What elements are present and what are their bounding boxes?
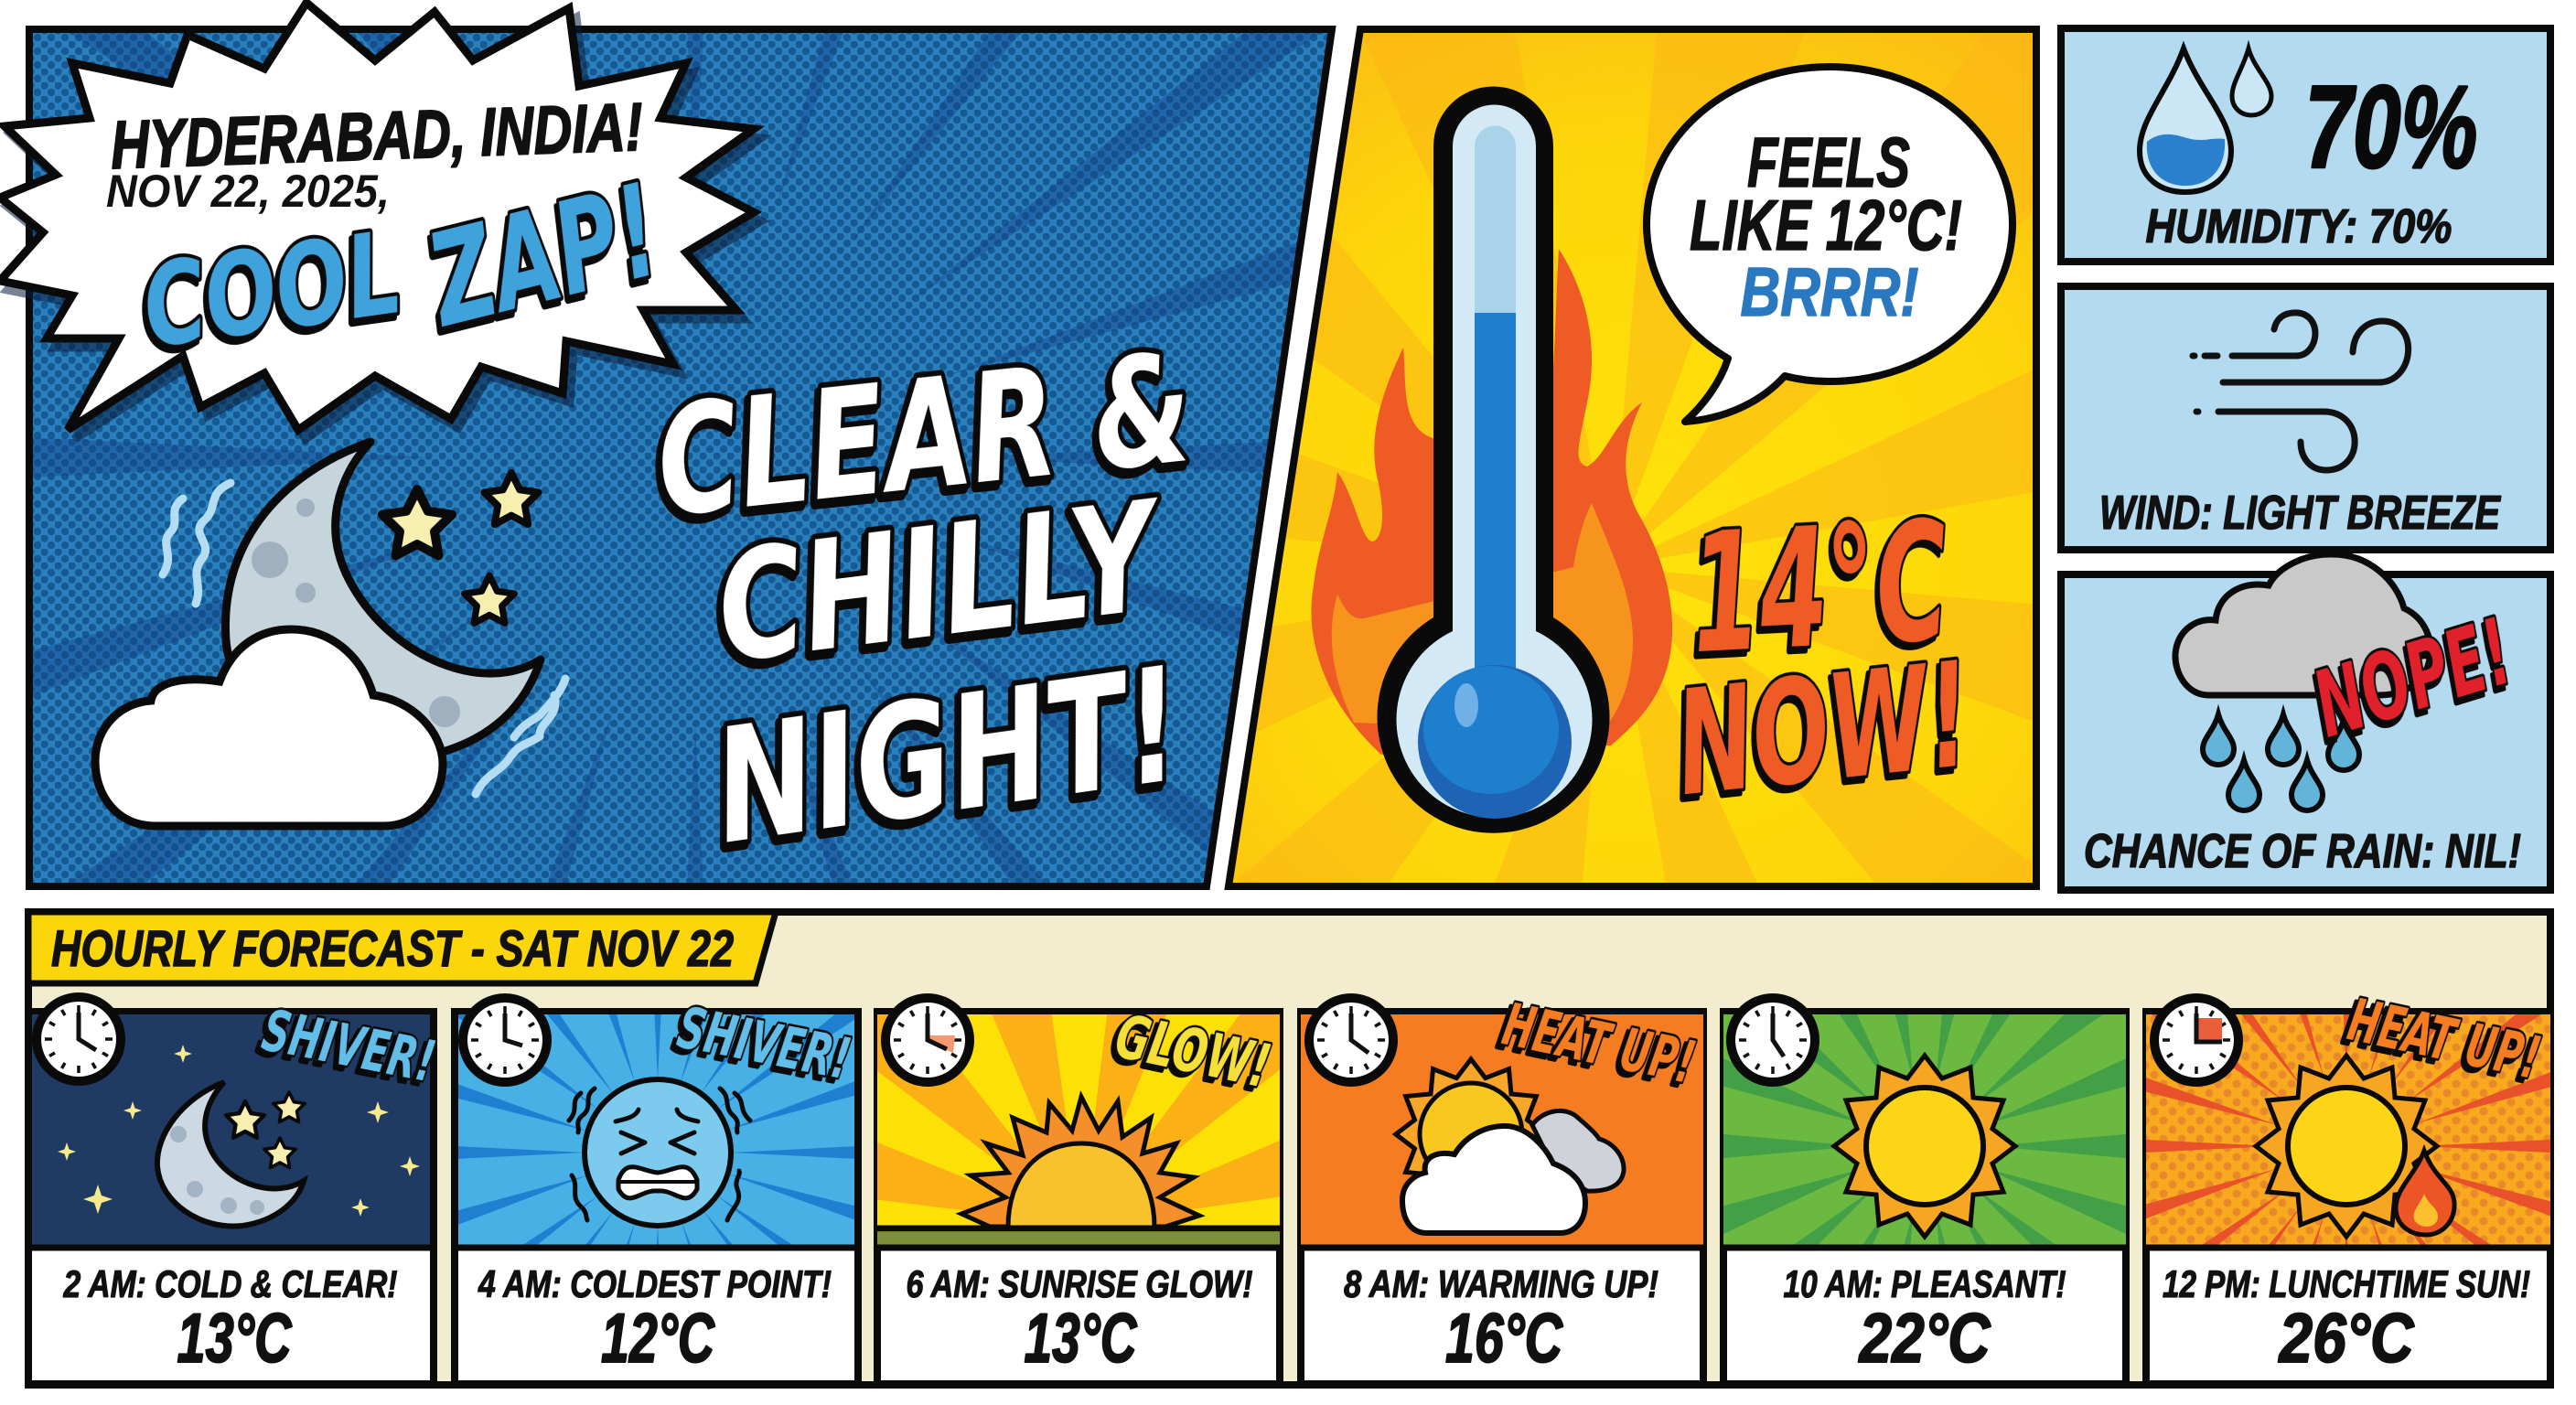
caption: 8 AM: WARMING UP! <box>1344 1262 1658 1305</box>
sound effect: shiver: SHIVER! <box>672 994 856 1092</box>
heading: clear and chilly night <box>649 320 1199 879</box>
panel: main night sky <box>0 0 1597 1359</box>
card: 12 pm <box>2142 993 2550 1381</box>
location text: HYDERABAD, INDIA! <box>110 89 644 183</box>
callout: feels like speech bubble: LIKE 12°C! <box>1690 185 1962 265</box>
callout: feels like speech bubble: BRRR! <box>1740 253 1919 330</box>
caption: 10 AM: PLEASANT! <box>1784 1262 2066 1305</box>
heading: clear and chilly night: NIGHT! <box>704 632 1192 879</box>
icon: clock <box>1304 993 1398 1087</box>
scene: sun behind clouds <box>1301 1014 1703 1245</box>
icon: clock <box>881 993 974 1087</box>
temperature: 16°C <box>1445 1300 1563 1378</box>
card: 10 am <box>1720 993 2130 1381</box>
icon: wind lines <box>2193 313 2409 470</box>
caption: 6 AM: SUNRISE GLOW! <box>906 1262 1253 1305</box>
icon: clock <box>32 992 125 1086</box>
icon: rain cloud <box>2175 554 2431 810</box>
icon: clock <box>458 993 552 1087</box>
scene: sunrise <box>877 1014 1280 1244</box>
heading: clear and chilly night: CLEAR & <box>649 320 1199 551</box>
scene: hot sun <box>2146 1014 2550 1244</box>
temperature: 22°C <box>1858 1300 1991 1378</box>
card: 8 am <box>1297 992 1707 1384</box>
icon: water drops <box>2140 48 2271 192</box>
callout: feels like speech bubble <box>1647 67 2012 422</box>
callout: feels like speech bubble: FEELS <box>1747 123 1910 202</box>
icon: clock <box>1726 993 1819 1087</box>
cool zap text: ZAP! <box>413 156 673 357</box>
current temperature text <box>1669 487 1978 829</box>
panel: humidity <box>2061 28 2550 262</box>
callout: starburst with location <box>0 3 754 430</box>
panel: hourly forecast <box>25 908 2554 1389</box>
scene: night sky <box>32 1014 430 1245</box>
date text: NOV 22, 2025, <box>106 166 390 217</box>
scene: shivering face <box>458 1014 854 1244</box>
current temperature text: NOW! <box>1669 631 1978 829</box>
temperature: 13°C <box>177 1300 292 1378</box>
heading: clear and chilly night: CHILLY <box>708 467 1175 697</box>
sound effect: shiver: SHIVER! <box>257 997 441 1095</box>
humidity value: 70% <box>2305 62 2477 193</box>
caption: 2 AM: COLD & CLEAR! <box>63 1262 398 1305</box>
sound effect: glow: GLOW! <box>1110 1001 1276 1102</box>
icon: white cloud <box>95 629 443 826</box>
panel: wind <box>2061 286 2550 550</box>
sound effect: heat up: HEAT UP! <box>1497 992 1701 1098</box>
heading: hourly forecast banner: HOURLY FORECAST - SAT NOV 22 <box>51 919 734 977</box>
icon: crescent moon <box>225 442 541 759</box>
temperature: 13°C <box>1025 1300 1137 1378</box>
heading: hourly forecast banner <box>28 912 776 983</box>
cool zap text: COOL <box>135 207 409 374</box>
temperature: 26°C <box>2278 1300 2414 1378</box>
panel: current temperature <box>1224 26 2040 890</box>
icon: flames <box>1311 249 1672 755</box>
card: 4 am <box>451 993 862 1381</box>
card: 6 am <box>874 993 1283 1381</box>
icon: thermometer <box>1378 86 1610 833</box>
temperature: 12°C <box>601 1300 715 1378</box>
cool zap text <box>135 156 673 374</box>
caption: 4 AM: COLDEST POINT! <box>478 1262 832 1305</box>
icon: cold shiver lines <box>163 483 565 794</box>
icon: clock <box>2150 993 2243 1087</box>
current temperature text: 14°C <box>1687 487 1952 691</box>
card: 2 am <box>28 992 441 1384</box>
scene: pleasant sun <box>1723 1014 2126 1244</box>
icon: stars <box>382 473 539 623</box>
humidity label: HUMIDITY: 70% <box>2146 200 2452 253</box>
panel: chance of rain <box>2061 554 2550 890</box>
